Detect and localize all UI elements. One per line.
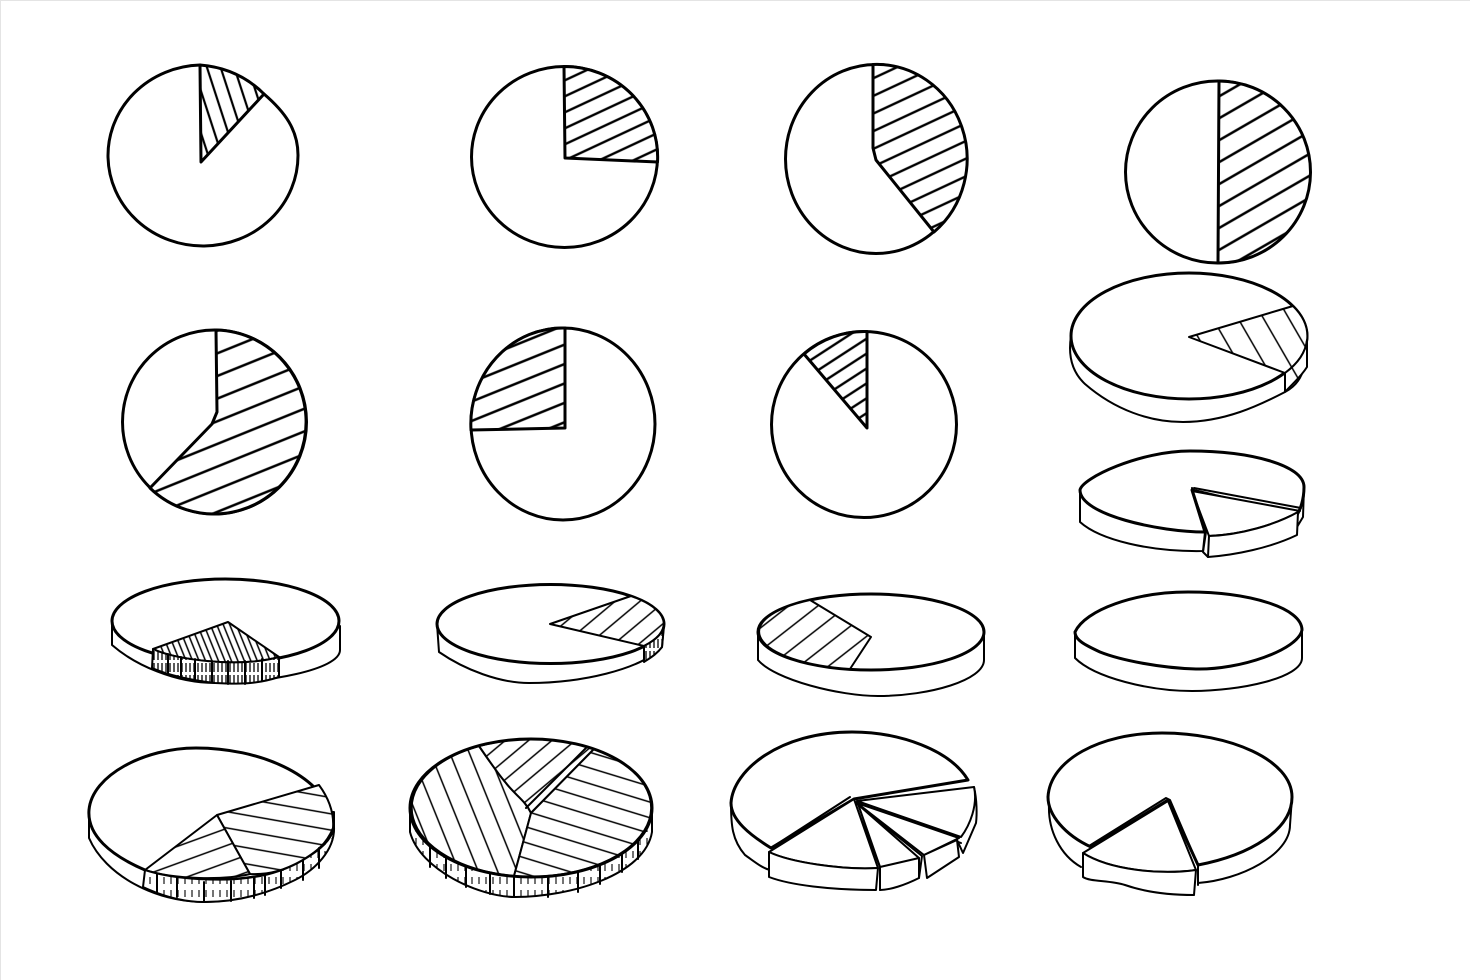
3d pie: right hatched slice, thin edge bbox=[437, 584, 664, 683]
pie chart: narrow upper hatched slice bbox=[772, 331, 956, 518]
pie chart: upper left quarter hatched bbox=[471, 328, 655, 520]
3d pie: fully hatched three slices bbox=[410, 739, 652, 897]
3d pie: upper left hatched slice bbox=[758, 594, 984, 696]
pie chart: two thirds hatched bbox=[122, 330, 306, 514]
pie chart: quarter hatched slice bbox=[472, 66, 658, 248]
3d pie: one pulled out slice bbox=[1048, 733, 1292, 895]
3d pie: front dense hatched slice bbox=[112, 579, 340, 684]
pie chart: small steep hatched slice bbox=[108, 65, 298, 246]
3d pie: right hatched slice bbox=[1070, 273, 1307, 422]
pie chart: half hatched bbox=[1126, 81, 1311, 263]
3d pie: plain disc bbox=[1075, 592, 1302, 691]
pie chart: large hatched slice bbox=[786, 64, 967, 253]
3d pie: two hatched slices, segmented edge bbox=[89, 748, 334, 902]
3d pie: small pulled out slice bbox=[1080, 451, 1304, 557]
3d pie: four pulled out slices bbox=[731, 732, 977, 890]
